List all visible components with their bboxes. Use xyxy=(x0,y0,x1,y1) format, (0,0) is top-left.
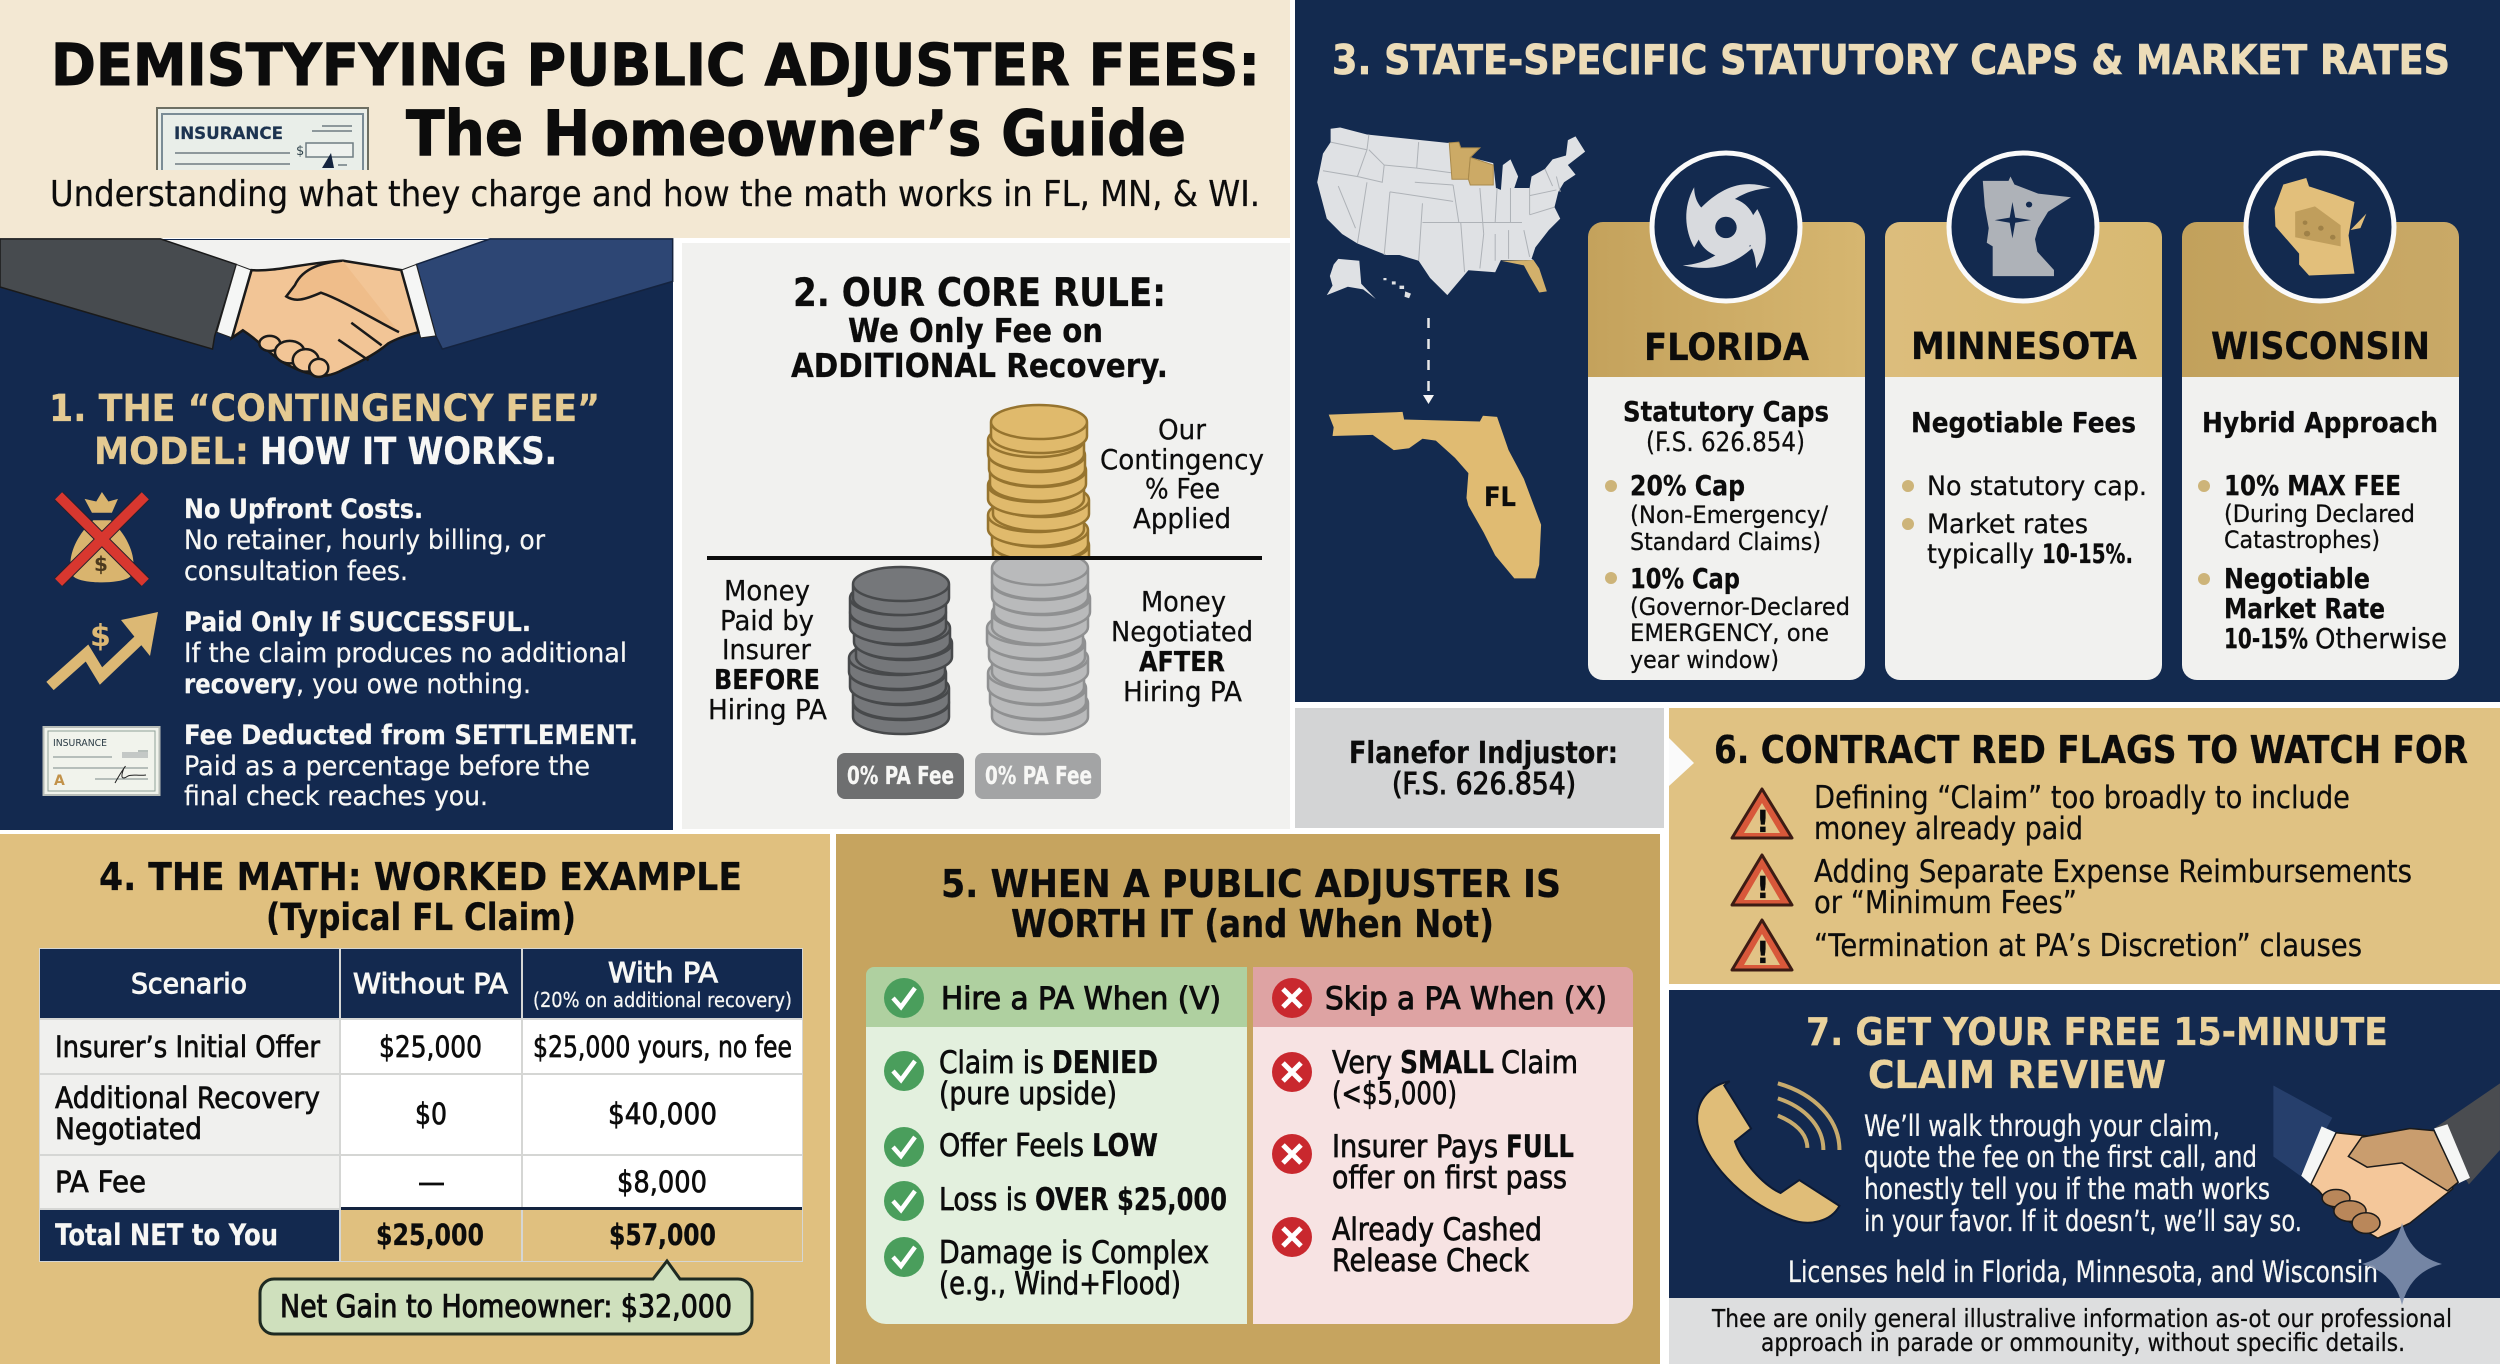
item: complex damage: Damage is Complex xyxy=(939,1235,1209,1271)
item: full offer: FULL xyxy=(1506,1129,1574,1165)
bullet: 20 percent: 20% Cap xyxy=(1630,469,1745,502)
text: fee deducted xyxy=(184,720,638,812)
heading 1: HOW IT WORKS. xyxy=(260,430,557,473)
column: hire a PA: Hire a PA When (V) xyxy=(941,981,1221,1017)
icon: minnesota star xyxy=(1949,153,2097,301)
heading 4 xyxy=(99,855,742,939)
label: after hiring xyxy=(1111,585,1253,708)
heading 2: We Only Fee on xyxy=(848,311,1103,350)
chart: light coin stack after xyxy=(987,551,1090,734)
icon: settlement check: A xyxy=(54,773,65,789)
map: united states xyxy=(1317,128,1585,299)
column: hire a PA xyxy=(866,967,1247,1324)
label: contingency fee: Our xyxy=(1158,413,1206,446)
table: fee comparison: — xyxy=(418,1165,445,1199)
panel: statute callout: (F.S. 626.854) xyxy=(1392,767,1576,802)
flag 2: or “Minimum Fees” xyxy=(1814,885,2077,921)
bullet: 10 percent: EMERGENCY, one xyxy=(1630,619,1829,647)
icon: wisconsin cheese xyxy=(2246,153,2394,301)
panel: statute callout xyxy=(1295,708,1664,828)
card: florida: Statutory Caps xyxy=(1623,395,1829,428)
panel: 2 core rule xyxy=(682,243,1290,829)
text: paid only if successful: If the claim produces no additional xyxy=(184,638,627,669)
table: fee comparison: $8,000 xyxy=(617,1165,707,1199)
flag 1: Defining “Claim” too broadly to include xyxy=(1814,780,2350,816)
heading 1: 1. THE “CONTINGENCY FEE” xyxy=(49,387,600,430)
table: fee comparison: Without PA xyxy=(353,967,508,1000)
text: review body: quote the fee on the first call, and xyxy=(1864,1140,2257,1174)
text: fee deducted: final check reaches you. xyxy=(184,781,488,812)
text: no upfront costs xyxy=(184,494,546,587)
table: fee comparison: PA Fee xyxy=(55,1165,146,1199)
flag 1: ! xyxy=(1756,805,1770,840)
text: paid only if successful: Paid Only If SUCCESSFUL. xyxy=(184,607,531,638)
heading 5: 5. WHEN A PUBLIC ADJUSTER IS xyxy=(941,862,1561,906)
item: full offer xyxy=(1272,1129,1574,1196)
map: florida xyxy=(1329,412,1541,578)
item: denied: DENIED xyxy=(1052,1045,1158,1081)
flag 2 xyxy=(1732,854,2412,921)
text: review body xyxy=(1864,1109,2302,1238)
bullet: 10 percent max: Catastrophes) xyxy=(2224,526,2380,554)
panel: footer disclaimer xyxy=(1669,1298,2500,1364)
table: fee comparison: Additional Recovery xyxy=(55,1081,320,1115)
item: over 25000: OVER $25,000 xyxy=(1035,1182,1227,1218)
bullet: no cap: No statutory cap. xyxy=(1927,471,2147,502)
item: cashed check: Already Cashed xyxy=(1332,1212,1542,1248)
item: denied: Claim is xyxy=(939,1045,1044,1081)
card title: MINNESOTA xyxy=(1911,325,2137,368)
label: after hiring: Money xyxy=(1141,585,1226,618)
icon: rising arrow with dollar xyxy=(50,612,158,686)
card: minnesota xyxy=(1885,153,2162,680)
icon: handshake small xyxy=(2273,1083,2500,1238)
callout: net gain xyxy=(260,1261,752,1334)
heading 7: CLAIM REVIEW xyxy=(1868,1053,2166,1097)
card: wisconsin: Hybrid Approach xyxy=(2202,406,2438,439)
bullet: 20 percent xyxy=(1605,469,1829,556)
bullet: market rates xyxy=(1902,509,2133,570)
heading 2: ADDITIONAL Recovery. xyxy=(791,346,1168,385)
label: after hiring: Negotiated xyxy=(1111,615,1253,648)
title line 1: DEMISTYFYING PUBLIC ADJUSTER FEES: xyxy=(51,31,1260,99)
panel: 6 red flags xyxy=(1669,708,2500,984)
item: small claim: Very xyxy=(1332,1045,1392,1081)
arrow: pointer from callout xyxy=(1669,738,1694,786)
bullet: market rates: Market rates xyxy=(1927,509,2088,540)
bullet: negotiable xyxy=(2198,562,2447,655)
panel: footer disclaimer: approach in parade or ommounity, without specific details. xyxy=(1761,1328,2405,1357)
heading 4: 4. THE MATH: WORKED EXAMPLE xyxy=(99,855,742,899)
table: fee comparison: $0 xyxy=(415,1097,447,1131)
heading 1: MODEL: xyxy=(94,430,249,473)
item: complex damage xyxy=(884,1235,1209,1302)
label: contingency fee: % Fee xyxy=(1145,472,1220,505)
text: review body: We’ll walk through your claim, xyxy=(1864,1109,2220,1143)
icon: settlement check: INSURANCE xyxy=(53,738,107,749)
bullet: 20 percent: Standard Claims) xyxy=(1630,528,1821,556)
heading 4: (Typical FL Claim) xyxy=(266,896,576,939)
text: no upfront costs: No Upfront Costs. xyxy=(184,494,423,525)
panel: header xyxy=(0,0,1290,238)
table: fee comparison: $25,000 xyxy=(376,1218,484,1252)
arrow: dashed map zoom xyxy=(1423,318,1434,404)
table: fee comparison xyxy=(39,948,803,1262)
item: full offer: offer on first pass xyxy=(1332,1160,1567,1196)
bullet: 20 percent: (Non-Emergency/ xyxy=(1630,501,1829,529)
table: fee comparison: Scenario xyxy=(131,967,247,1000)
heading 7: 7. GET YOUR FREE 15-MINUTE xyxy=(1806,1010,2388,1054)
text: paid only if successful: , you owe nothing. xyxy=(296,669,531,700)
card title: WISCONSIN xyxy=(2211,325,2430,368)
item: small claim: SMALL xyxy=(1400,1045,1494,1081)
map: florida: FL xyxy=(1484,482,1516,513)
label: before hiring: Insurer xyxy=(722,633,811,666)
text: no upfront costs: No retainer, hourly billing, or xyxy=(184,525,546,556)
card: wisconsin xyxy=(2182,153,2459,680)
bullet: 10 percent xyxy=(1605,562,1850,674)
bullet: 10 percent: 10% Cap xyxy=(1630,562,1740,595)
table: fee comparison: $57,000 xyxy=(609,1218,716,1252)
icon: insurance check: $ xyxy=(296,144,304,159)
panel: 5 when worth it xyxy=(836,834,1660,1364)
table: fee comparison: Negotiated xyxy=(55,1112,202,1146)
item: low offer xyxy=(884,1127,1158,1167)
bullet: market rates: typically xyxy=(1927,539,2034,570)
text: no upfront costs: consultation fees. xyxy=(184,556,408,587)
chart: gold coin stack fee xyxy=(988,405,1089,576)
divider line xyxy=(707,556,1262,560)
item: low offer: LOW xyxy=(1092,1128,1158,1164)
card title: FLORIDA xyxy=(1644,326,1809,369)
bullet: market rates: 10-15%. xyxy=(2042,539,2133,570)
heading 2 xyxy=(791,271,1168,385)
card: florida: (F.S. 626.854) xyxy=(1646,427,1805,458)
icon: sparkle xyxy=(2362,1223,2442,1305)
bullet: negotiable: Negotiable xyxy=(2224,562,2370,595)
flag 3: ! xyxy=(1756,936,1770,971)
label: after hiring: AFTER xyxy=(1139,645,1225,678)
label: before hiring: Money xyxy=(724,574,810,607)
icon: insurance check: INSURANCE xyxy=(174,124,283,144)
bullet: 10 percent: (Governor-Declared xyxy=(1630,593,1850,621)
bullet: negotiable: Market Rate xyxy=(2224,592,2385,625)
heading 5: WORTH IT (and When Not) xyxy=(1011,902,1494,946)
icon: hurricane xyxy=(1652,153,1800,301)
bullet: 10 percent: year window) xyxy=(1630,646,1779,674)
item: cashed check: Release Check xyxy=(1332,1243,1529,1279)
table: fee comparison: With PA xyxy=(608,956,718,989)
table: fee comparison: Total NET to You xyxy=(55,1218,278,1252)
flag 3: “Termination at PA’s Discretion” clauses xyxy=(1814,928,2362,964)
badge: 0% fee before: 0% PA Fee xyxy=(847,761,954,790)
bullet: 10 percent max: (During Declared xyxy=(2224,500,2415,528)
text: fee deducted: Paid as a percentage before the xyxy=(184,751,590,782)
item: small claim xyxy=(1272,1045,1578,1112)
label: before hiring xyxy=(708,574,827,726)
label: before hiring: Paid by xyxy=(720,604,814,637)
icon: crossed-out money bag xyxy=(59,492,145,582)
heading 5 xyxy=(941,862,1561,946)
panel: 1 contingency fee model xyxy=(0,239,673,830)
title line 2: The Homeowner’s Guide xyxy=(406,97,1186,170)
badge: 0% fee after: 0% PA Fee xyxy=(985,761,1092,790)
item: denied: (pure upside) xyxy=(939,1076,1117,1112)
label: contingency fee xyxy=(1100,413,1264,535)
item: complex damage: (e.g., Wind+Flood) xyxy=(939,1266,1181,1302)
item: over 25000 xyxy=(884,1181,1227,1221)
flag 2: Adding Separate Expense Reimbursements xyxy=(1814,854,2412,890)
item: cashed check xyxy=(1272,1212,1542,1279)
panel: 7 free review xyxy=(1669,990,2500,1298)
label: before hiring: BEFORE xyxy=(714,663,820,696)
text: fee deducted: Fee Deducted from SETTLEMENT. xyxy=(184,720,638,751)
icon: settlement check xyxy=(44,727,160,795)
text: review body: honestly tell you if the math works xyxy=(1864,1172,2270,1206)
column: skip a PA xyxy=(1253,967,1633,1324)
flag 2: ! xyxy=(1756,871,1770,906)
text: paid only if successful xyxy=(184,607,627,700)
heading 1 xyxy=(49,387,600,473)
panel: statute callout: Flanefor Indjustor: xyxy=(1349,736,1618,771)
subtitle: Understanding what they charge and how the math works in FL, MN, & WI. xyxy=(50,174,1260,215)
icon: crossed-out money bag: $ xyxy=(94,552,108,576)
callout: net gain: Net Gain to Homeowner: $32,000 xyxy=(280,1289,732,1325)
card: florida xyxy=(1588,153,1865,680)
item: full offer: Insurer Pays xyxy=(1332,1129,1498,1165)
label: after hiring: Hiring PA xyxy=(1123,675,1242,708)
card: minnesota: Negotiable Fees xyxy=(1911,406,2136,439)
heading 2: 2. OUR CORE RULE: xyxy=(793,271,1166,316)
text: review body: in your favor. If it doesn’t, we’ll say so. xyxy=(1864,1204,2302,1238)
icon: insurance check xyxy=(156,107,369,170)
icon: rising arrow with dollar: $ xyxy=(90,619,111,654)
heading 7 xyxy=(1806,1010,2388,1097)
chart: gray coin stack before xyxy=(849,567,952,734)
bullet: 10 percent max xyxy=(2198,469,2415,554)
item: small claim: (<$5,000) xyxy=(1332,1076,1457,1112)
flag 1: money already paid xyxy=(1814,811,2083,847)
column: skip a PA: Skip a PA When (X) xyxy=(1325,981,1607,1017)
bullet: negotiable: Otherwise xyxy=(2315,622,2447,655)
label: contingency fee: Contingency xyxy=(1100,443,1264,476)
flag 3 xyxy=(1732,920,2362,971)
item: over 25000: Loss is xyxy=(939,1182,1027,1218)
icon: handshake xyxy=(0,239,673,377)
label: contingency fee: Applied xyxy=(1133,502,1231,535)
panel: 3 state caps xyxy=(1295,0,2500,702)
table: fee comparison: $25,000 xyxy=(379,1030,482,1064)
badge: 0% fee after xyxy=(975,753,1101,799)
label: before hiring: Hiring PA xyxy=(708,693,827,726)
bullet: 10 percent max: 10% MAX FEE xyxy=(2224,469,2401,502)
flag 1 xyxy=(1732,780,2350,847)
item: low offer: Offer Feels xyxy=(939,1128,1084,1164)
bullet: negotiable: 10-15% xyxy=(2224,622,2308,655)
item: small claim: Claim xyxy=(1501,1045,1578,1081)
badge: 0% fee before xyxy=(837,753,964,799)
table: fee comparison: $40,000 xyxy=(608,1097,717,1131)
panel: 4 worked example xyxy=(0,834,830,1364)
table: fee comparison: (20% on additional recovery) xyxy=(533,988,792,1012)
text: paid only if successful: recovery xyxy=(184,669,296,700)
icon: phone xyxy=(1697,1081,1839,1223)
item: denied xyxy=(884,1045,1158,1112)
table: fee comparison: Insurer’s Initial Offer xyxy=(55,1030,320,1064)
table: fee comparison: $25,000 yours, no fee xyxy=(533,1030,792,1064)
